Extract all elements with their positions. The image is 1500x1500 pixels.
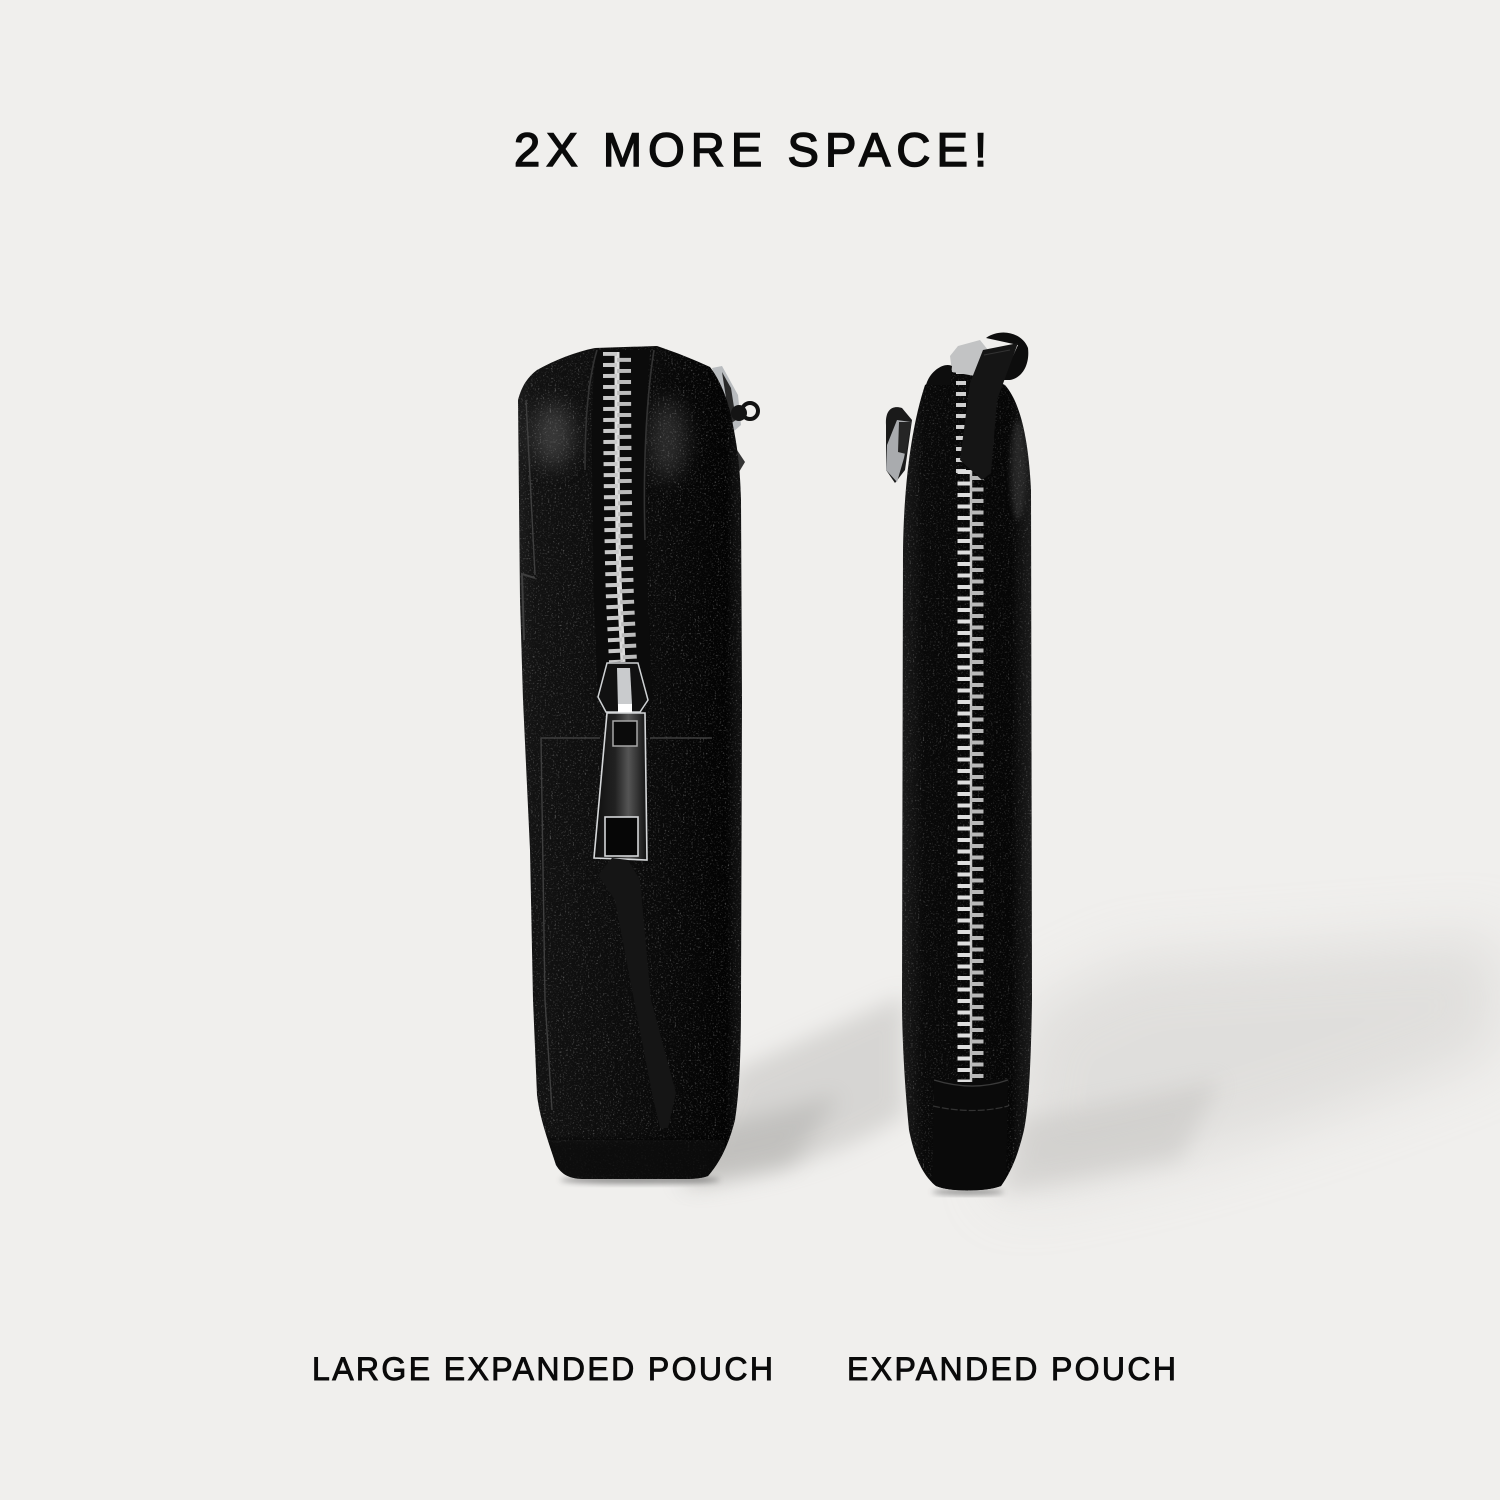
right product: expanded pouch — [886, 333, 1040, 1200]
leather pull strap — [926, 333, 1028, 480]
title: 2X MORE SPACE! — [514, 123, 987, 176]
right zipper puller at the top left — [886, 407, 912, 483]
right pouch body — [902, 370, 1032, 1190]
label: large expanded pouch: LARGE EXPANDED POUCH — [312, 1351, 773, 1387]
right zipper interlocked teeth — [964, 470, 977, 1082]
left pocket seams — [522, 400, 712, 1110]
left zipper slider — [594, 663, 648, 860]
label: expanded pouch: EXPANDED POUCH — [847, 1351, 1176, 1387]
left product: large expanded pouch — [500, 340, 760, 1190]
left zipper tape — [592, 350, 652, 700]
cast shadows — [560, 935, 1500, 1196]
left zipper teeth — [610, 352, 630, 662]
left pouch body — [518, 346, 742, 1179]
large zipper pull tab — [594, 713, 647, 860]
infographic canvas — [314, 132, 1499, 1381]
left zipper puller at the top right — [712, 366, 758, 472]
leather zipper tassel — [598, 858, 676, 1128]
right zipper upper single-row teeth — [956, 370, 966, 475]
right pouch bottom tab — [932, 1080, 1008, 1190]
left zipper binding highlights — [585, 350, 654, 540]
right zipper silver slider — [950, 340, 988, 376]
